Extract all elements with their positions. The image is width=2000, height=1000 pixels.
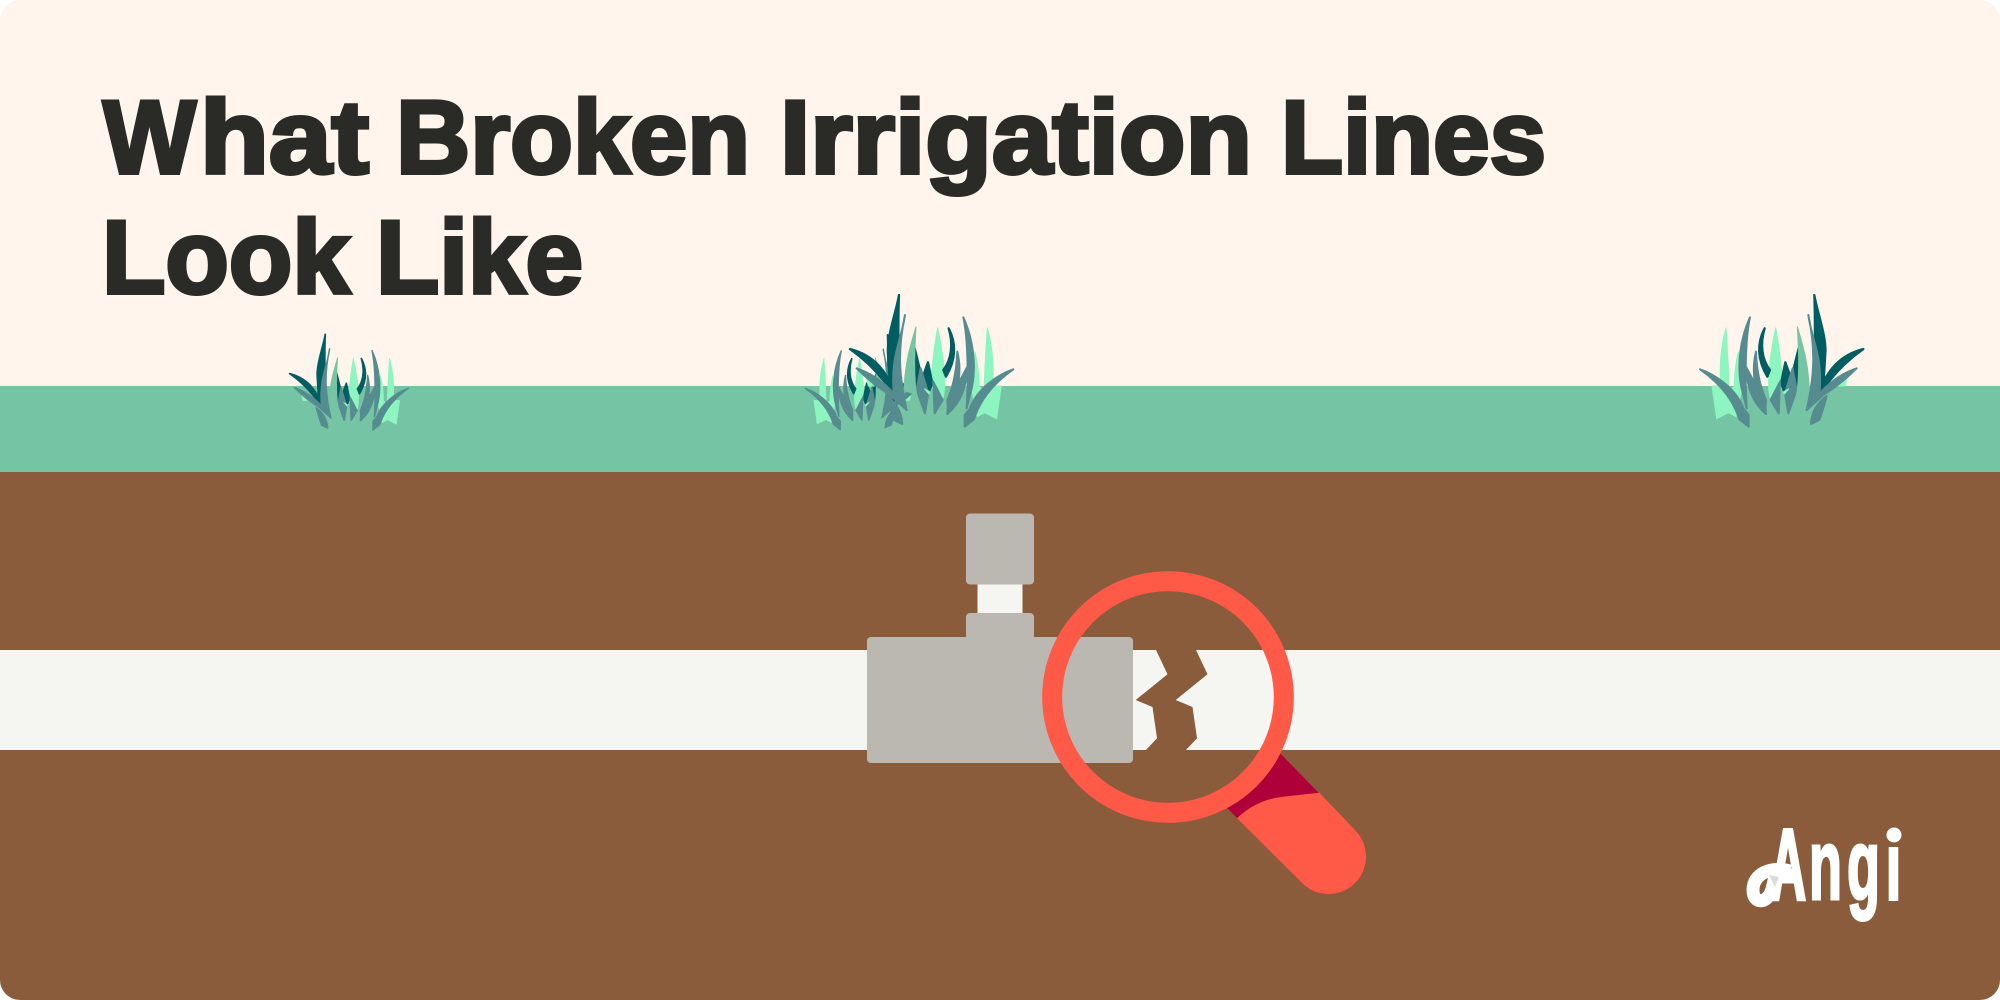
title: Like [376, 200, 583, 316]
title: W [103, 80, 197, 196]
pipe crack [1136, 650, 1208, 750]
logo: Angi: n [1809, 809, 1842, 921]
title: Irrigation [780, 80, 1252, 196]
magnifier ring [1052, 581, 1284, 813]
title: Lines [1281, 80, 1546, 196]
logo: Angi: A [1770, 809, 1806, 921]
icon: grass tuft left [290, 334, 408, 430]
soil [0, 472, 2000, 1000]
background: sky [0, 0, 2000, 386]
magnifier handle [1221, 747, 1366, 894]
logo: Angi [1746, 828, 1902, 922]
logo: Angi: g [1847, 809, 1880, 921]
title [100, 96, 1544, 296]
title: Broken [396, 80, 750, 196]
title: Look [102, 200, 350, 316]
lawn band [0, 386, 2000, 472]
logo: Angi: i [1886, 809, 1901, 921]
sprinkler valve fitting [867, 514, 1133, 763]
title: hat [200, 80, 369, 196]
icon: grass tuft center [805, 295, 1013, 430]
irrigation pipe [0, 650, 2000, 750]
icon: magnifying glass [1052, 581, 1366, 894]
icon: grass tuft right [1700, 295, 1863, 427]
